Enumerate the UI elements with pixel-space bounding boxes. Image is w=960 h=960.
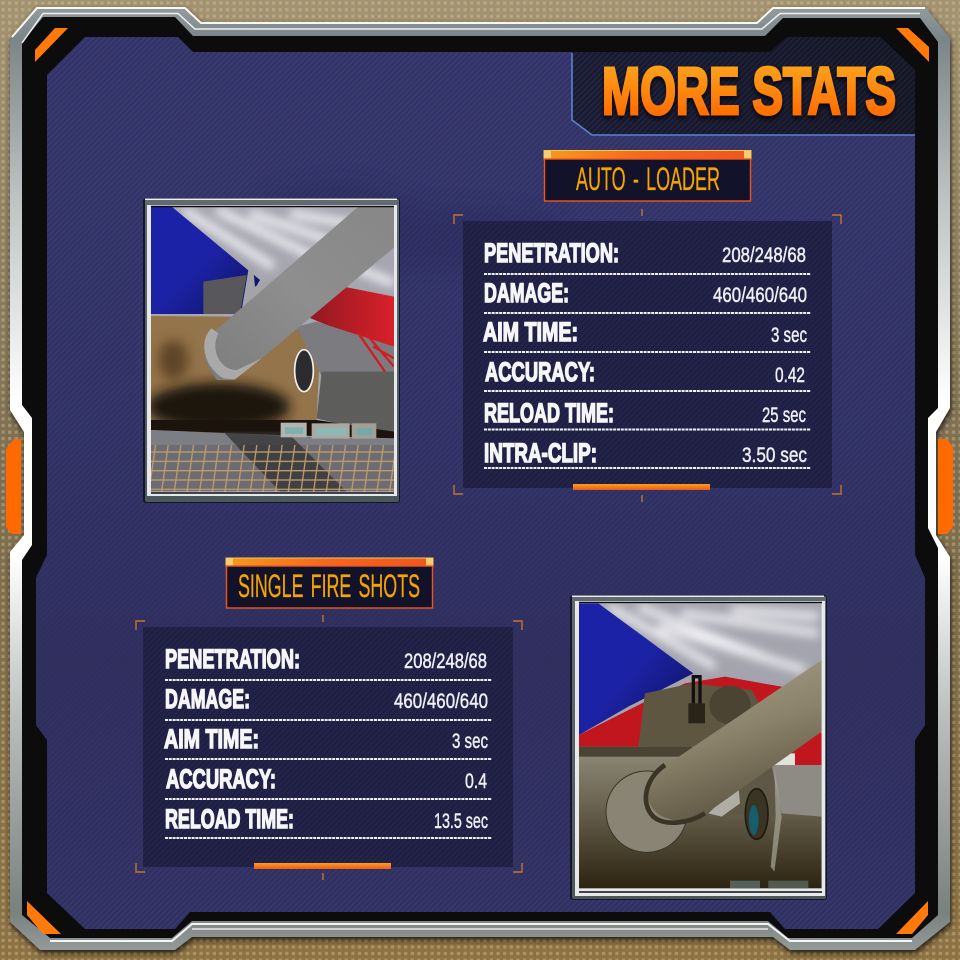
row: damage [484, 278, 807, 308]
corner brackets and ticks [454, 209, 841, 502]
image: czech flag and tank, olive hull [570, 595, 827, 900]
row: penetration [165, 644, 487, 674]
row: reload time: RELOAD TIME: [165, 804, 294, 834]
row: damage: 460/460/640 [394, 690, 488, 713]
corner brackets and ticks [136, 615, 522, 880]
row: damage: DAMAGE: [484, 278, 569, 308]
row: intra-clip: INTRA-CLIP: [484, 438, 597, 468]
row: penetration: PENETRATION: [484, 238, 619, 268]
row: aim time: AIM TIME: [164, 724, 259, 754]
row: aim time [164, 724, 488, 754]
row: aim time: 3 sec [452, 730, 488, 753]
stats panel: auto-loader [454, 209, 841, 502]
heading: auto-loader: AUTO - LOADER [576, 161, 720, 197]
row: accuracy: 0.42 [775, 364, 805, 387]
row: reload time: 13.5 sec [434, 810, 488, 833]
orange bar [573, 484, 710, 490]
row: aim time: AIM TIME: [483, 317, 578, 347]
row: aim time: 3 sec [771, 324, 807, 347]
heading: auto-loader [544, 150, 751, 201]
row: aim time [483, 317, 807, 347]
row: penetration: 208/248/68 [404, 650, 487, 673]
row: accuracy: ACCURACY: [485, 357, 595, 387]
row: damage: 460/460/640 [713, 284, 807, 307]
row: accuracy [166, 764, 487, 794]
row: reload time [484, 398, 806, 428]
heading: single fire shots [226, 558, 433, 608]
row: accuracy: ACCURACY: [166, 764, 276, 794]
row: intra-clip: 3.50 sec [742, 444, 807, 467]
row: penetration: 208/248/68 [722, 244, 806, 267]
orange bar [254, 863, 391, 869]
row: penetration [484, 238, 806, 268]
image: czech flag and tank, camouflage net [143, 198, 400, 503]
row: accuracy: 0.4 [465, 770, 487, 793]
row: reload time: RELOAD TIME: [484, 398, 614, 428]
row: penetration: PENETRATION: [165, 644, 300, 674]
row: damage: DAMAGE: [165, 684, 250, 714]
title panel [572, 37, 915, 135]
heading: single fire shots: SINGLE FIRE SHOTS [238, 568, 420, 604]
stats panel: single fire shots [136, 615, 522, 880]
row: accuracy [485, 357, 805, 387]
row: reload time: 25 sec [762, 404, 806, 427]
row: damage [165, 684, 488, 714]
row: reload time [165, 804, 488, 834]
row: intra-clip [484, 438, 807, 468]
